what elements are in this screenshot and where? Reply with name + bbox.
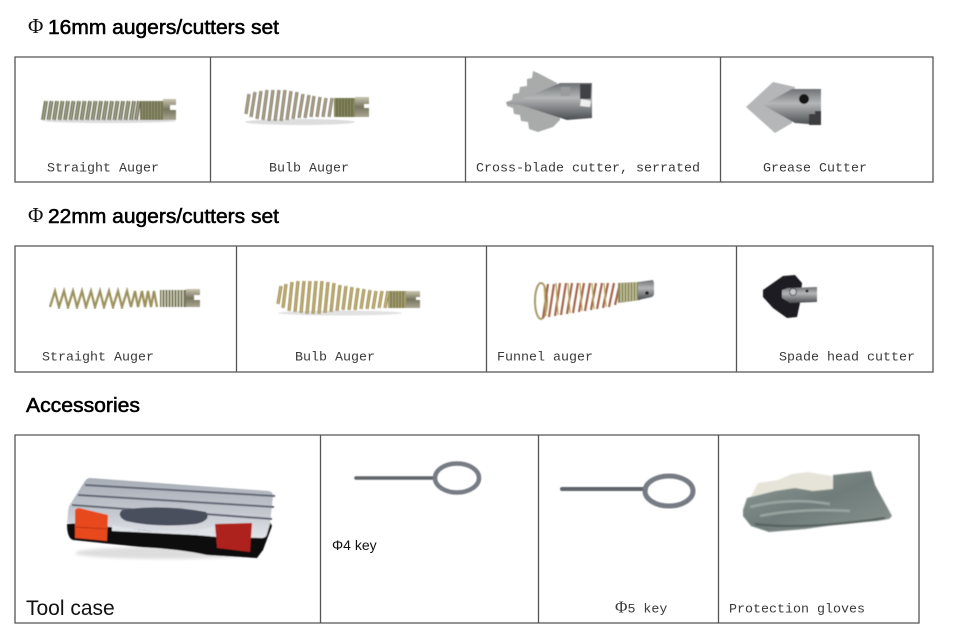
heading: accessories: Accessories [26, 395, 140, 417]
icon: cross-blade serrated cutter [506, 71, 592, 132]
panel: 22mm augers and cutters table [15, 246, 933, 372]
icon: 22mm straight auger [50, 289, 200, 307]
heading: 22mm set: Φ [28, 203, 43, 227]
icon: 22mm bulb auger [278, 281, 420, 316]
label: tool case: Tool case [26, 597, 115, 620]
icon: tool case [67, 478, 275, 559]
label: bulb auger: Bulb Auger [269, 162, 349, 176]
icon: key 4 [356, 464, 479, 492]
label: funnel auger: Funnel auger [497, 350, 593, 366]
label: spade head cutter: Spade head cutter [779, 350, 915, 366]
icon: spade head cutter [763, 275, 817, 318]
label: key 5: Φ5 key [615, 598, 667, 618]
label: grease cutter: Grease Cutter [763, 162, 867, 176]
label: protection gloves: Protection gloves [729, 602, 865, 618]
heading: 16mm set: 16mm augers/cutters set [48, 17, 279, 39]
heading: 16mm set: Φ [28, 14, 43, 38]
label: key 4: Φ4 key [332, 537, 377, 553]
panel: accessories table [15, 435, 919, 623]
label: straight auger: Straight Auger [42, 350, 154, 366]
icon: key 5 [562, 476, 693, 506]
icon: protection gloves [743, 471, 892, 532]
label: cross-blade cutter: Cross-blade cutter, serrated [476, 162, 700, 176]
icon: 16mm straight auger [43, 99, 176, 123]
panel: 16mm augers and cutters table [15, 57, 933, 182]
icon: funnel auger [535, 280, 654, 319]
heading: 22mm set: 22mm augers/cutters set [48, 206, 279, 228]
label: bulb auger: Bulb Auger [295, 350, 375, 366]
icon: grease cutter [746, 82, 821, 133]
icon: 16mm bulb auger [245, 90, 369, 125]
label: straight auger: Straight Auger [47, 162, 159, 176]
